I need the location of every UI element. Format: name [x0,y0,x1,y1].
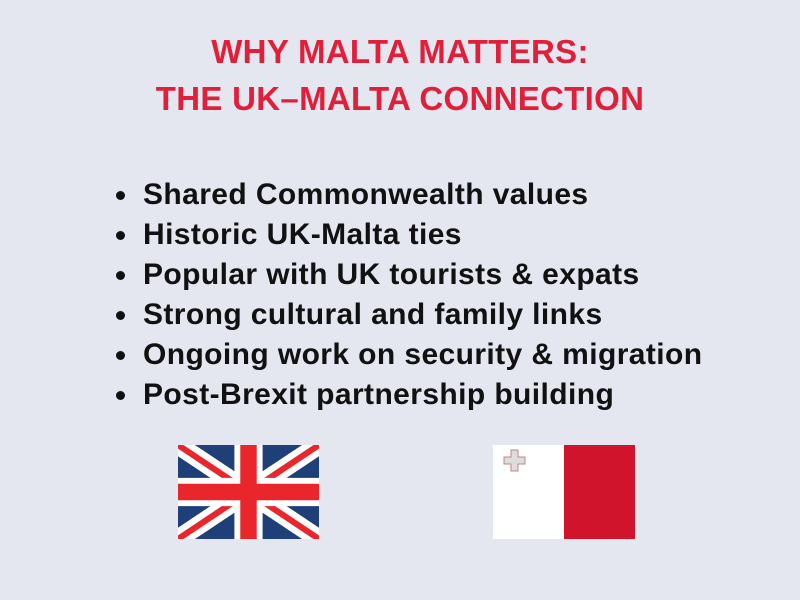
icon: Malta flag [493,445,635,539]
title: THE UK–MALTA CONNECTION [156,80,644,117]
bullet list: Shared Commonwealth values [143,178,589,211]
bullet list: Ongoing work on security & migration [143,338,702,371]
bullet list: Strong cultural and family links [143,298,603,331]
bullet list: Popular with UK tourists & expats [143,258,640,291]
icon: UK flag [178,445,319,539]
bullet list [116,178,702,411]
George Cross [504,450,525,471]
title [156,33,644,117]
bullet list: Historic UK-Malta ties [143,218,462,251]
bullet list: Post-Brexit partnership building [143,378,614,411]
title: WHY MALTA MATTERS: [211,33,589,70]
